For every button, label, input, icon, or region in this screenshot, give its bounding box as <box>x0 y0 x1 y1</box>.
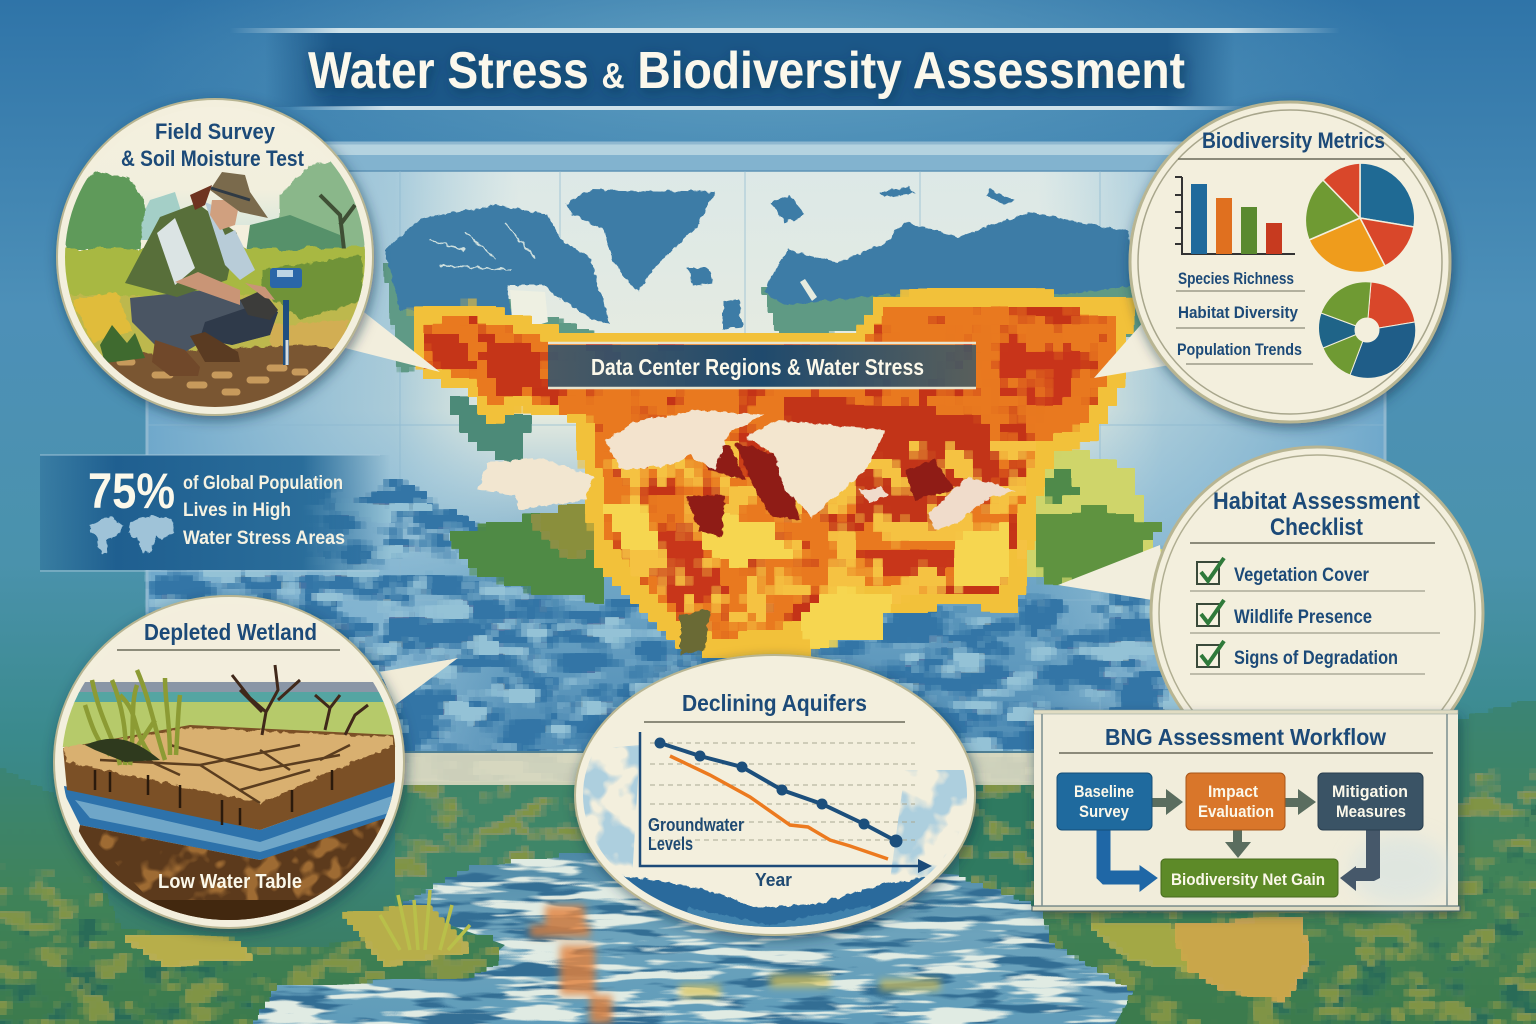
checklist items: Vegetation Cover <box>1234 565 1370 586</box>
icon: reeds at water edge <box>380 890 470 950</box>
stat number: 75% <box>88 463 175 519</box>
map frame lower band <box>400 752 1040 786</box>
map: pale arctic landmasses <box>478 410 1016 655</box>
step: impact evaluation <box>1186 773 1285 830</box>
axis labels <box>648 815 792 890</box>
axis labels: Groundwater <box>648 815 744 835</box>
axis labels: Year <box>755 870 792 890</box>
donut chart <box>1319 282 1416 378</box>
panel: field survey <box>57 99 440 415</box>
metric labels <box>1177 269 1302 359</box>
heading: soil moisture test: & Soil Moisture Test <box>121 146 305 171</box>
heading: checklist: Checklist <box>1270 514 1363 541</box>
step: baseline survey: Baseline <box>1074 782 1134 801</box>
title: Water Stress & Biodiversity Assessment <box>308 42 1185 100</box>
panel: BNG assessment workflow <box>1032 710 1460 911</box>
bar chart <box>1175 177 1295 254</box>
heading: BNG assessment workflow: BNG Assessment Workflow <box>1105 724 1386 750</box>
icon: surveyor figure <box>125 172 302 376</box>
foliage: right bank <box>1045 700 1536 1024</box>
callout pointer: biodiversity <box>1094 320 1170 378</box>
line chart: groundwater levels <box>640 732 932 873</box>
step: mitigation measures: Measures <box>1336 802 1406 821</box>
heading: declining aquifers: Declining Aquifers <box>682 690 867 716</box>
step: impact evaluation: Evaluation <box>1198 802 1274 821</box>
panel: declining aquifers <box>575 655 975 940</box>
step: baseline survey: Survey <box>1079 802 1129 821</box>
map: northern blue continents <box>385 187 1150 370</box>
stat description: of Global Population <box>183 473 343 494</box>
step: biodiversity net gain: Biodiversity Net Gain <box>1171 870 1325 889</box>
foliage: mid background behind water <box>395 788 1040 905</box>
step: impact evaluation: Impact <box>1208 782 1258 801</box>
step: mitigation measures <box>1318 773 1423 830</box>
heading: habitat assessment: Habitat Assessment <box>1213 488 1420 515</box>
water and reflection <box>250 845 1135 1024</box>
step: baseline survey <box>1057 773 1152 830</box>
callout pointer: wetland <box>380 658 458 705</box>
heading: field survey: Field Survey <box>155 119 276 144</box>
label: low water table: Low Water Table <box>158 871 302 893</box>
heading: biodiversity metrics: Biodiversity Metrics <box>1202 128 1385 153</box>
metric labels: Species Richness <box>1178 269 1294 288</box>
map label: data center regions <box>548 343 976 388</box>
metric labels: Habitat Diversity <box>1178 303 1298 322</box>
stat description: Lives in High <box>183 500 291 521</box>
map label: data center regions: Data Center Regions & Water Stress <box>591 354 924 380</box>
callout pointer: habitat <box>1058 545 1165 602</box>
arrows between workflow steps <box>1097 789 1380 891</box>
icon: small world map <box>88 516 174 555</box>
metric labels: Population Trends <box>1177 340 1302 359</box>
foliage: left bank <box>0 770 500 1024</box>
panel: habitat assessment checklist <box>1058 446 1484 710</box>
pie chart <box>1305 163 1415 272</box>
callout pointer: field survey <box>345 305 440 372</box>
map: water-stress heat layer <box>410 288 1132 660</box>
stat description: Water Stress Areas <box>183 528 345 549</box>
icon: soil moisture probe <box>270 268 302 365</box>
checklist items: Signs of Degradation <box>1234 648 1398 669</box>
heading: depleted wetland: Depleted Wetland <box>144 619 317 645</box>
checklist items: Wildlife Presence <box>1234 607 1372 628</box>
panel: biodiversity metrics <box>1094 102 1450 422</box>
step: mitigation measures: Mitigation <box>1332 782 1408 801</box>
stat panel: 75 percent <box>40 455 390 571</box>
panel: world map background <box>147 143 1385 780</box>
step: biodiversity net gain <box>1161 859 1338 897</box>
title banner <box>230 28 1340 110</box>
map: surrounding green land <box>445 395 1160 600</box>
panel: depleted wetland <box>50 596 458 930</box>
checklist items <box>1190 558 1440 674</box>
stat description <box>183 473 345 549</box>
axis labels: Levels <box>648 834 693 854</box>
